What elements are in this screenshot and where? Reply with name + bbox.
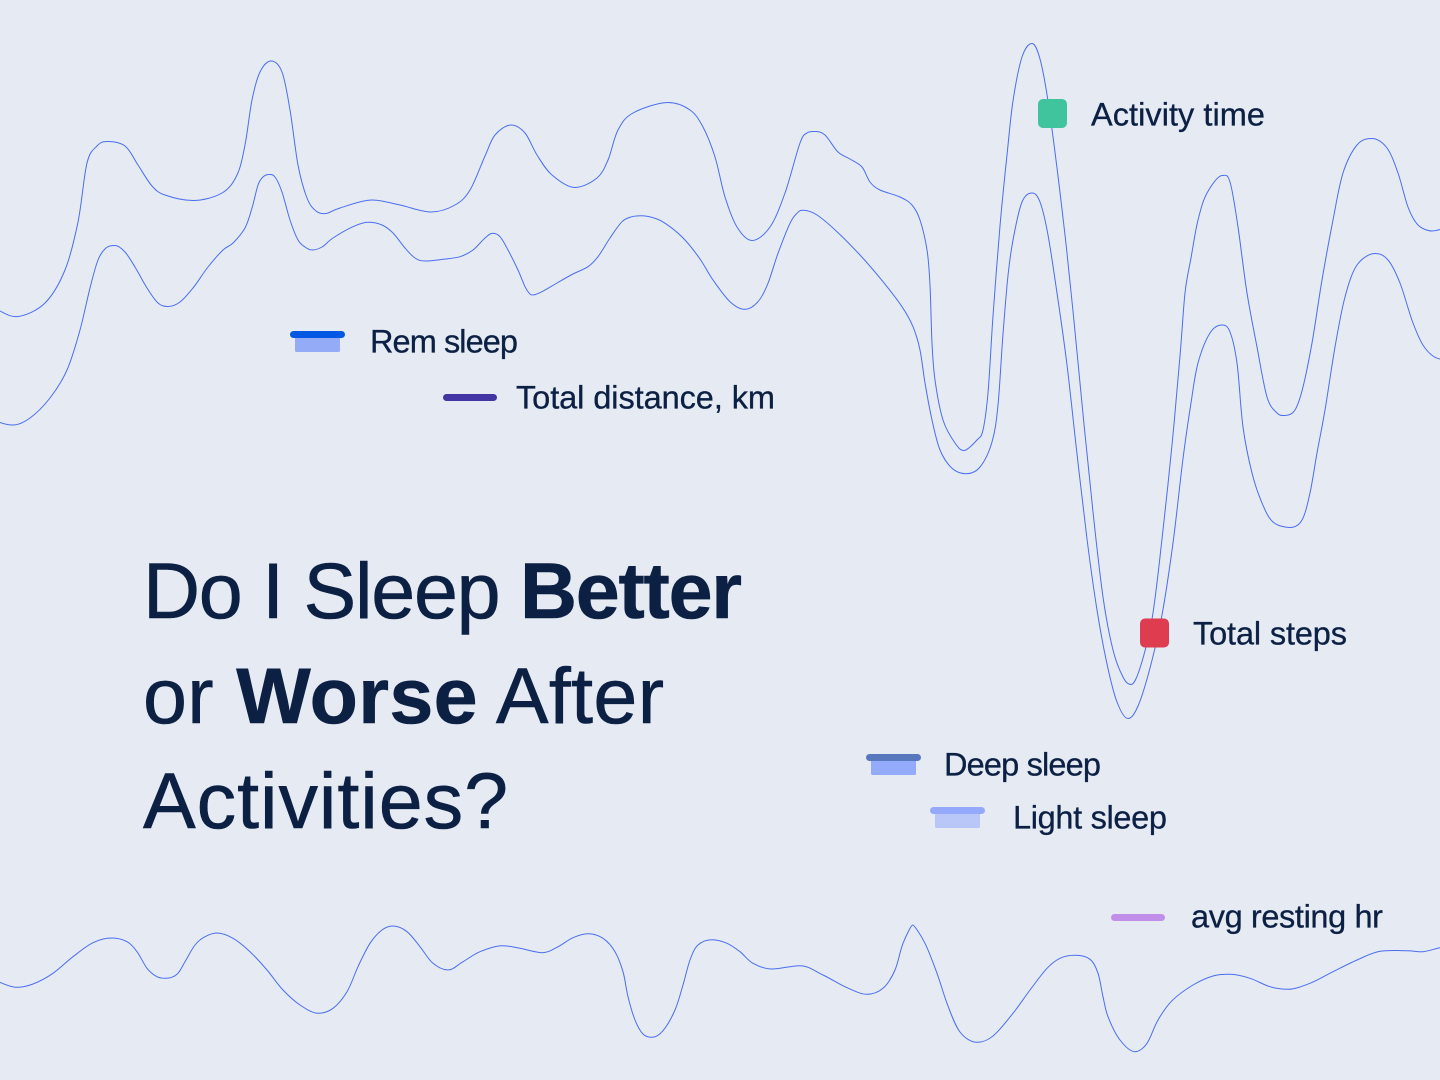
title: or Worse After	[143, 651, 664, 740]
legend: rem sleep: Rem sleep	[370, 324, 518, 360]
legend: deep sleep	[866, 746, 1101, 782]
title: Do I Sleep Better	[143, 546, 742, 635]
title	[143, 546, 742, 845]
line chart: middle curve	[0, 174, 1440, 718]
legend: total distance: Total distance, km	[516, 380, 775, 416]
legend: light sleep: Light sleep	[1013, 800, 1167, 836]
legend: deep sleep: Deep sleep	[944, 746, 1101, 782]
legend: avg resting hr: avg resting hr	[1191, 898, 1383, 934]
legend: total steps: Total steps	[1193, 616, 1347, 652]
legend: activity time: Activity time	[1091, 96, 1265, 132]
legend: light sleep	[930, 800, 1167, 836]
legend: rem sleep	[290, 324, 518, 360]
line chart: lower curve	[0, 925, 1440, 1052]
line chart: upper curve	[0, 44, 1440, 684]
title: Activities?	[143, 756, 508, 845]
